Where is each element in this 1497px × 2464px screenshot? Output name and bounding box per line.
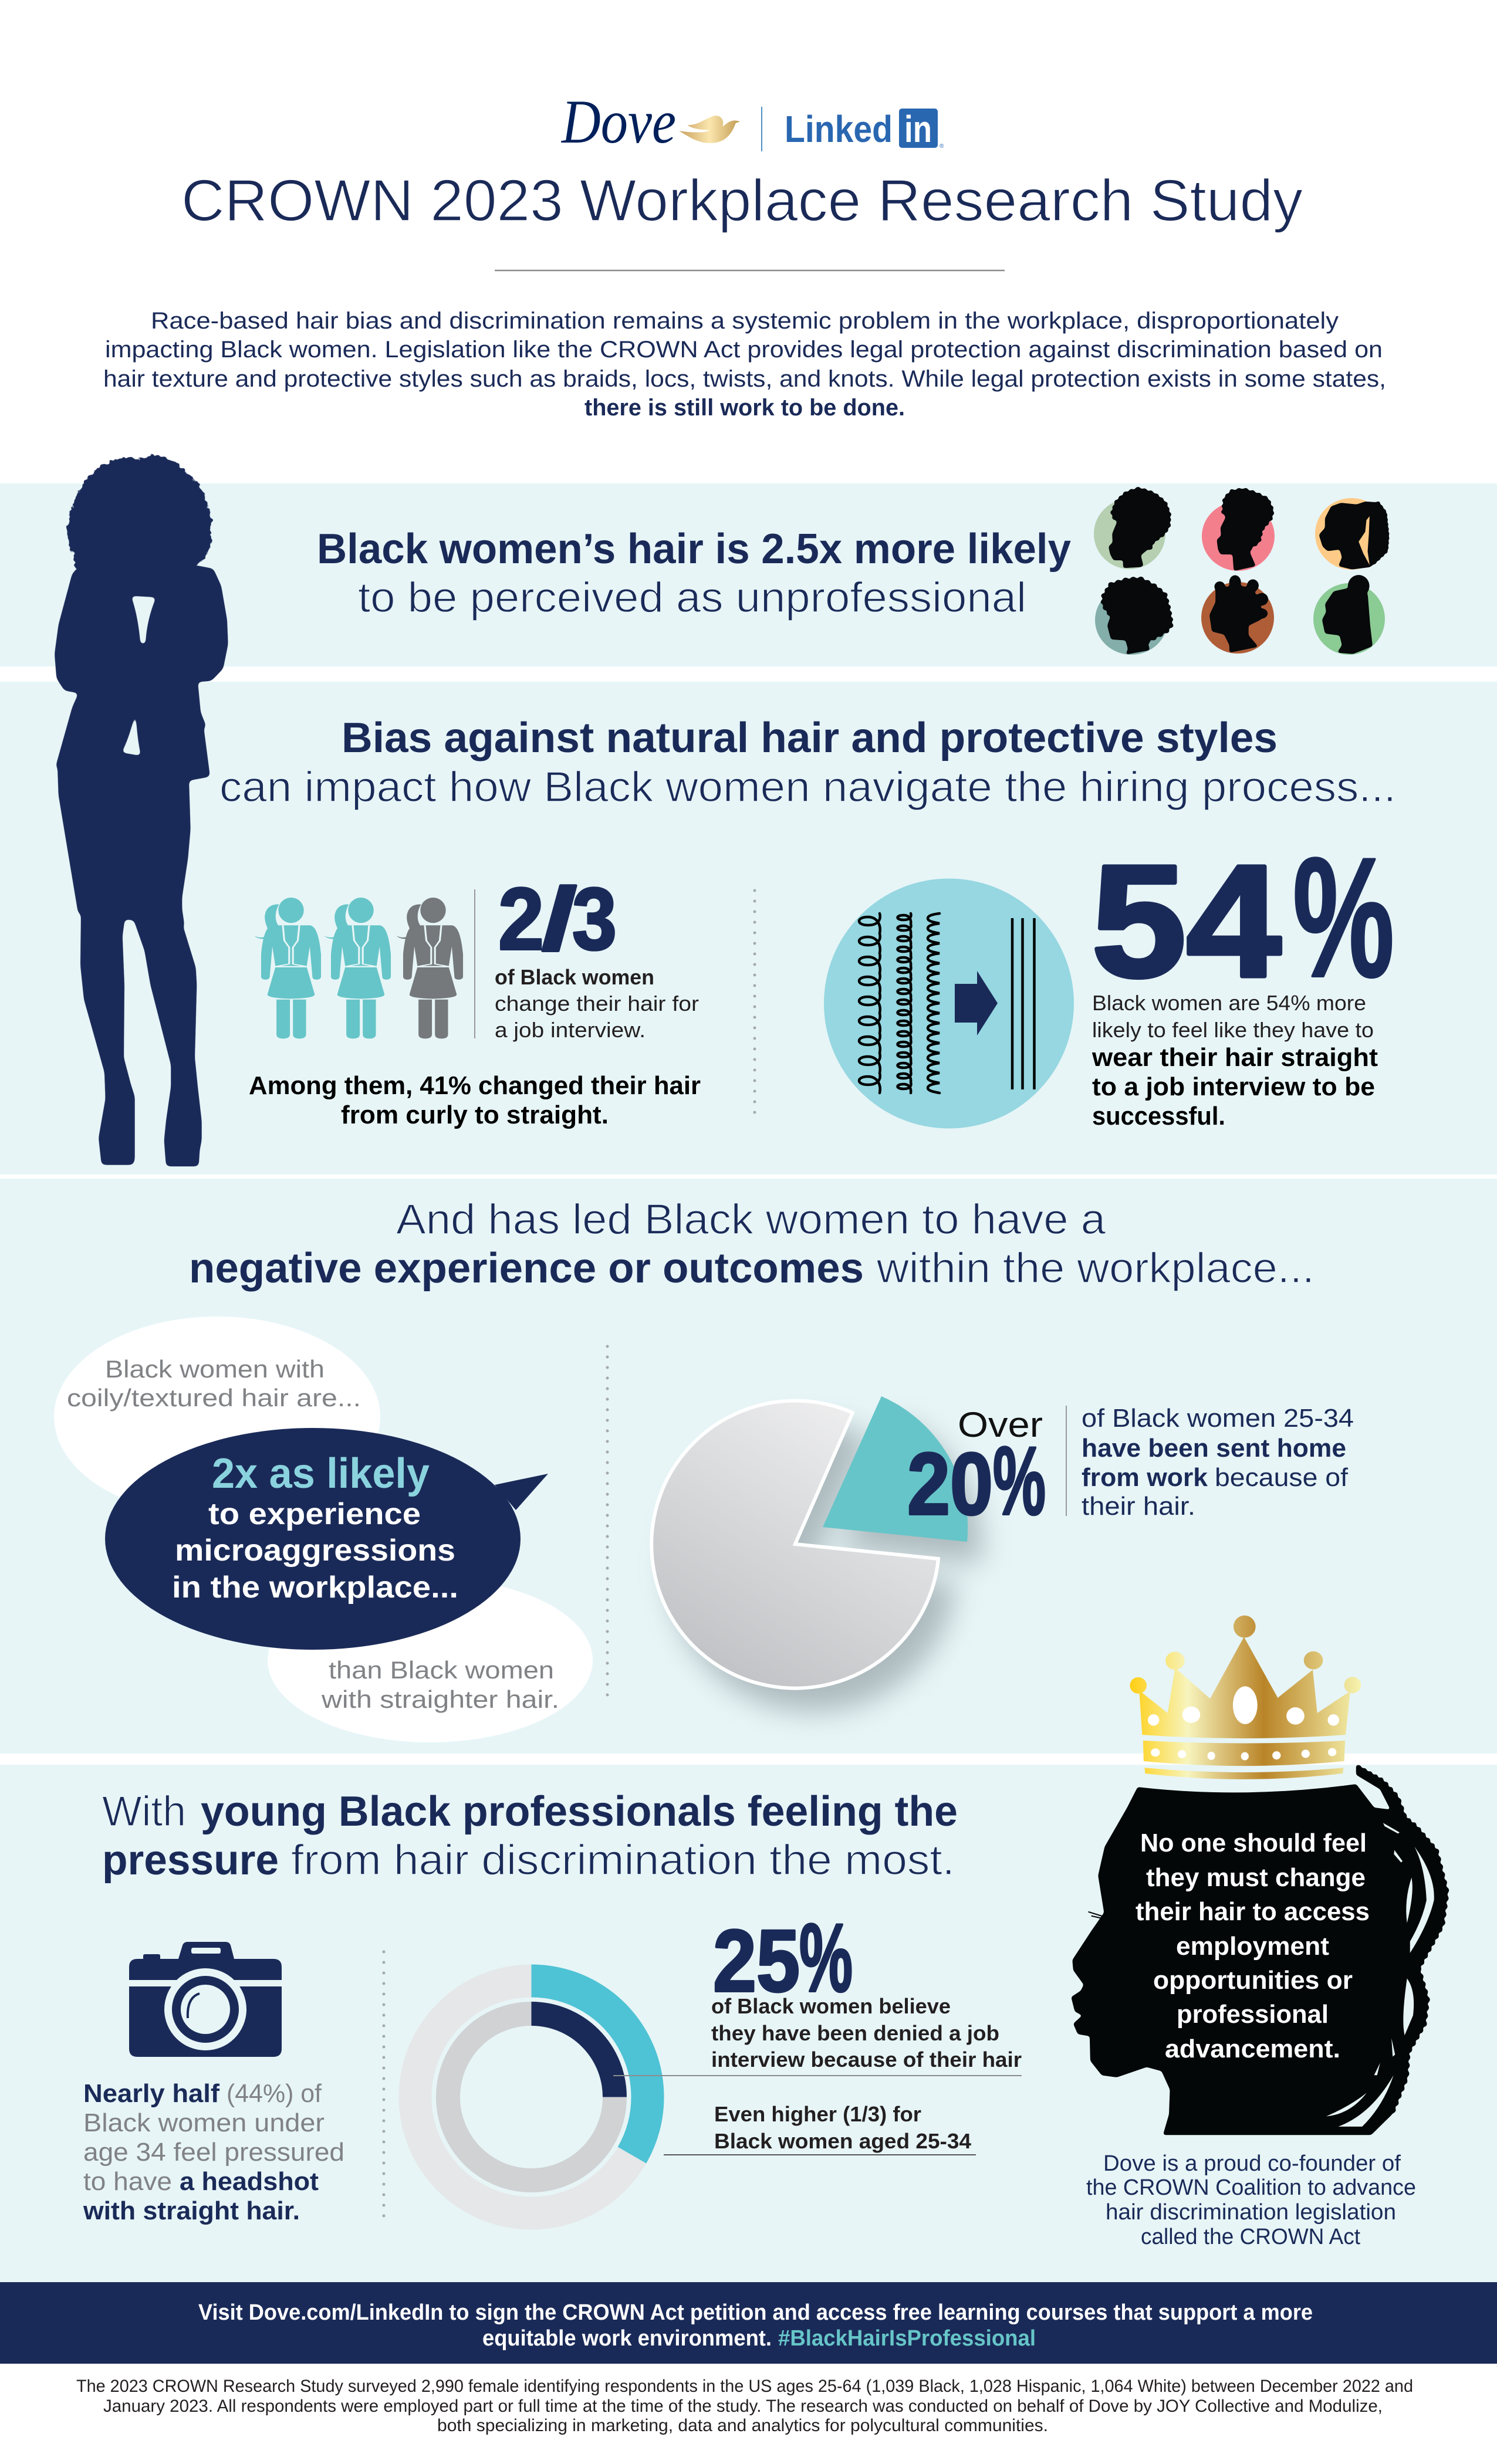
panel: hair perceived as unprofessional band <box>0 483 1497 666</box>
quote inside head: they must change <box>1146 1863 1366 1892</box>
text: among them 41% <box>249 1071 701 1129</box>
text: headshot statistic <box>83 2079 344 2225</box>
text: than Black women: than Black women <box>329 1656 554 1684</box>
stat: 25% <box>713 1904 853 2012</box>
quote inside head: opportunities or <box>1153 1966 1353 1995</box>
quote inside head: advancement. <box>1165 2035 1340 2063</box>
stat: over 20% <box>907 1405 1046 1535</box>
bubble: coily hair: coily/textured hair are... <box>67 1384 361 1412</box>
text: headshot statistic: a headshot <box>180 2167 319 2196</box>
curly strands <box>859 913 940 1093</box>
heading: young Black professionals: young Black professionals feeling the <box>201 1788 958 1835</box>
straight strands <box>1012 918 1034 1089</box>
text: sent home from work: from work <box>1082 1463 1208 1492</box>
leader line: 25% <box>613 2075 1022 2076</box>
footnote: January 2023. All respondents were employed part or full time at the time of the study. The research was conducted on behalf of Dove by JOY Collective and Modulize, <box>103 2397 1383 2416</box>
text: sent home from work: of Black women 25-34 <box>1082 1404 1354 1433</box>
icon: curly ponytail <box>1315 498 1388 570</box>
intro text: there is still work to be done. <box>584 395 905 421</box>
text: even higher <box>714 2102 971 2153</box>
text: sent home from work: have been sent home <box>1082 1434 1346 1463</box>
text: among them 41%: Among them, 41% changed their hair <box>249 1071 701 1100</box>
text: 54% explanation: likely to feel like they have to <box>1092 1018 1374 1042</box>
heading: young Black professionals: from hair discrimination the most. <box>291 1837 955 1884</box>
dotted divider <box>753 891 756 1118</box>
text: of Black women change their hair: of Black women <box>495 965 654 989</box>
title divider <box>495 270 1005 271</box>
text: headshot statistic: Nearly half <box>83 2079 219 2108</box>
logo: LinkedIn in box: in <box>904 108 932 150</box>
intro text: impacting Black women. Legislation like the CROWN Act provides legal protection against discrimination based on <box>105 337 1383 363</box>
quote inside head: No one should feel <box>1140 1829 1367 1857</box>
text: of Black women change their hair: a job interview. <box>495 1018 646 1042</box>
silhouette hair <box>67 455 211 586</box>
stat: 25%: % <box>799 1904 853 2012</box>
illustration: curly to straight hair <box>824 879 1074 1129</box>
text: 54% explanation: to a job interview to be <box>1092 1072 1375 1101</box>
icon: camera <box>129 1942 282 2057</box>
footnote: both specializing in marketing, data and analytics for polycultural communities. <box>437 2416 1048 2435</box>
heading: bias against natural hair: can impact how Black women navigate the hiring process... <box>219 764 1396 811</box>
heading: 2.5x more likely <box>317 526 1071 621</box>
intro text: Race-based hair bias and discrimination remains a systemic problem in the workplace, disproportionately <box>151 308 1339 334</box>
teal pie slice <box>823 1396 968 1542</box>
quote inside head: employment <box>1176 1932 1329 1961</box>
heading: 2.5x more likely: Black women’s hair is 2.5x more likely <box>317 526 1071 573</box>
stat: 54%: % <box>1293 823 1394 1013</box>
stat: 2/3: / <box>542 869 577 968</box>
heading: negative experience <box>189 1196 1314 1292</box>
bubble: 2x as likely: to experience <box>208 1497 421 1531</box>
quote inside head <box>1136 1829 1370 2063</box>
call to action bar: equitable work environment. <box>482 2326 772 2351</box>
text: Dove co-founder: called the CROWN Act <box>1141 2225 1360 2249</box>
text: denied a job interview: interview because of their hair <box>711 2047 1022 2072</box>
text: sent home from work: because of <box>1215 1463 1349 1492</box>
stat: 25%: 25 <box>713 1911 800 2010</box>
icon: bantu knots <box>1201 575 1274 654</box>
text: sent home from work: their hair. <box>1082 1492 1195 1521</box>
illustration: gold crown <box>1130 1616 1361 1779</box>
logo: Dove wordmark: Dove <box>560 87 676 156</box>
arrow <box>955 971 998 1035</box>
text: Dove co-founder: the CROWN Coalition to advance <box>1086 2175 1416 2200</box>
intro text <box>103 308 1386 421</box>
bubble: coily hair <box>54 1316 380 1517</box>
quote inside head: professional <box>1177 2000 1329 2029</box>
illustration: standing woman silhouette <box>55 455 228 1166</box>
bubble: coily hair: Black women with <box>105 1355 325 1383</box>
heading: young Black professionals <box>102 1788 958 1884</box>
intro text: hair texture and protective styles such as braids, locs, twists, and knots. While legal protection exists in some states, <box>103 366 1386 392</box>
call to action bar: Visit Dove.com/LinkedIn to sign the CROWN Act petition and access free learning courses that support a more <box>198 2300 1313 2325</box>
dotted divider <box>383 1952 385 2222</box>
speech bubbles <box>54 1316 593 1742</box>
heading: young Black professionals: With <box>102 1788 186 1835</box>
panel: young professionals band <box>0 1765 1497 2282</box>
text: denied a job interview <box>711 1994 1022 2072</box>
bubble: straighter hair <box>268 1578 593 1742</box>
circle background <box>824 879 1074 1129</box>
quote inside head: their hair to access <box>1136 1897 1370 1926</box>
footnote <box>76 2377 1413 2435</box>
text: than Black women: with straighter hair. <box>321 1685 559 1713</box>
logos: Dove and LinkedIn <box>560 87 944 156</box>
icon: rounded afro <box>1095 578 1171 655</box>
call to action bar: #BlackHairIsProfessional <box>778 2326 1036 2351</box>
text: 54% explanation: successful. <box>1092 1102 1225 1131</box>
text: headshot statistic: with straight hair. <box>83 2196 300 2225</box>
leader line: one third <box>664 2154 976 2155</box>
heading: bias against natural hair <box>219 715 1396 811</box>
heading: negative experience: And has led Black women to have a <box>396 1196 1106 1243</box>
text: of Black women change their hair <box>495 965 699 1042</box>
text: Dove co-founder: Dove is a proud co-founder of <box>1103 2151 1401 2176</box>
stat: 54% <box>1092 823 1394 1013</box>
text: even higher: Even higher (1/3) for <box>714 2102 921 2126</box>
dotted divider <box>606 1346 609 1705</box>
icon: high updo <box>1202 489 1275 571</box>
stat: over 20%: % <box>993 1427 1046 1535</box>
text: Dove co-founder: hair discrimination legislation <box>1106 2200 1396 2225</box>
text: of Black women change their hair: change their hair for <box>495 991 699 1016</box>
logo: LinkedIn wordmark: Linked <box>785 108 893 150</box>
silhouette body <box>55 561 228 1166</box>
icon: top bun <box>1313 575 1385 655</box>
text: even higher: Black women aged 25-34 <box>714 2129 971 2153</box>
text: denied a job interview: of Black women believe <box>711 1994 951 2018</box>
heading: negative experience: within the workplace... <box>876 1245 1314 1292</box>
stat: over 20%: 20 <box>907 1434 993 1533</box>
bubble: 2x as likely <box>105 1428 548 1650</box>
heading: negative experience: negative experience or outcomes <box>189 1245 864 1292</box>
text: headshot statistic: age 34 feel pressured <box>83 2138 344 2167</box>
stat: 2/3 <box>498 869 617 968</box>
stat: over 20%: Over <box>958 1405 1043 1444</box>
bubble: 2x as likely: microaggressions <box>175 1534 455 1568</box>
text: than Black women <box>321 1656 559 1713</box>
text: among them 41%: from curly to straight. <box>341 1101 609 1129</box>
pie shadow <box>669 1420 982 1712</box>
bubble: 2x as likely: in the workplace... <box>172 1571 458 1605</box>
heading: 2.5x more likely: to be perceived as unprofessional <box>358 574 1026 621</box>
text: 54% explanation <box>1092 991 1378 1131</box>
text: headshot statistic: to have <box>83 2167 172 2196</box>
text: 54% explanation: Black women are 54% more <box>1092 991 1366 1015</box>
call to action bar <box>0 2282 1497 2364</box>
divider line beside pictogram <box>474 889 475 1038</box>
gray pie slice <box>651 1401 938 1688</box>
stat: 2/3: 2 <box>498 869 544 968</box>
footnote: The 2023 CROWN Research Study surveyed 2,990 female identifying respondents in the US ages 25-64 (1,039 Black, 1,028 Hispanic, 1,064 White) between December 2022 and <box>76 2377 1413 2396</box>
heading: young Black professionals: pressure <box>102 1837 279 1884</box>
icon: afro puff <box>1094 489 1168 569</box>
heading: bias against natural hair: Bias against natural hair and protective styles <box>342 715 1278 761</box>
text: headshot statistic: Black women under <box>83 2108 325 2137</box>
bubble: 2x as likely: 2x as likely <box>212 1450 430 1497</box>
logo: LinkedIn in box: ® <box>940 143 944 150</box>
stat: 54%: 54 <box>1092 832 1282 1010</box>
text: sent home from work <box>1082 1404 1354 1521</box>
text: 54% explanation: wear their hair straight <box>1092 1043 1378 1072</box>
text: denied a job interview: they have been denied a job <box>711 2021 999 2045</box>
icon: three women pictogram <box>254 898 463 1038</box>
panel: negative workplace outcomes band <box>0 1179 1497 1754</box>
illustration: woman profile silhouette with braids <box>1071 1765 1448 2135</box>
logo divider <box>761 107 762 151</box>
text: Dove co-founder <box>1086 2151 1416 2249</box>
donut chart: 1/3 and 25% <box>415 1981 648 2213</box>
stat: 2/3: 3 <box>572 869 617 968</box>
text: headshot statistic: (44%) of <box>227 2079 322 2108</box>
pie chart: over 20% <box>651 1396 982 1712</box>
title: CROWN 2023 Workplace Research Study <box>181 168 1303 233</box>
icons: six hair style silhouettes <box>1094 489 1388 655</box>
icon: gold dove <box>679 116 740 143</box>
panel: hiring process band <box>0 682 1497 1175</box>
divider line beside 20% <box>1066 1406 1067 1516</box>
